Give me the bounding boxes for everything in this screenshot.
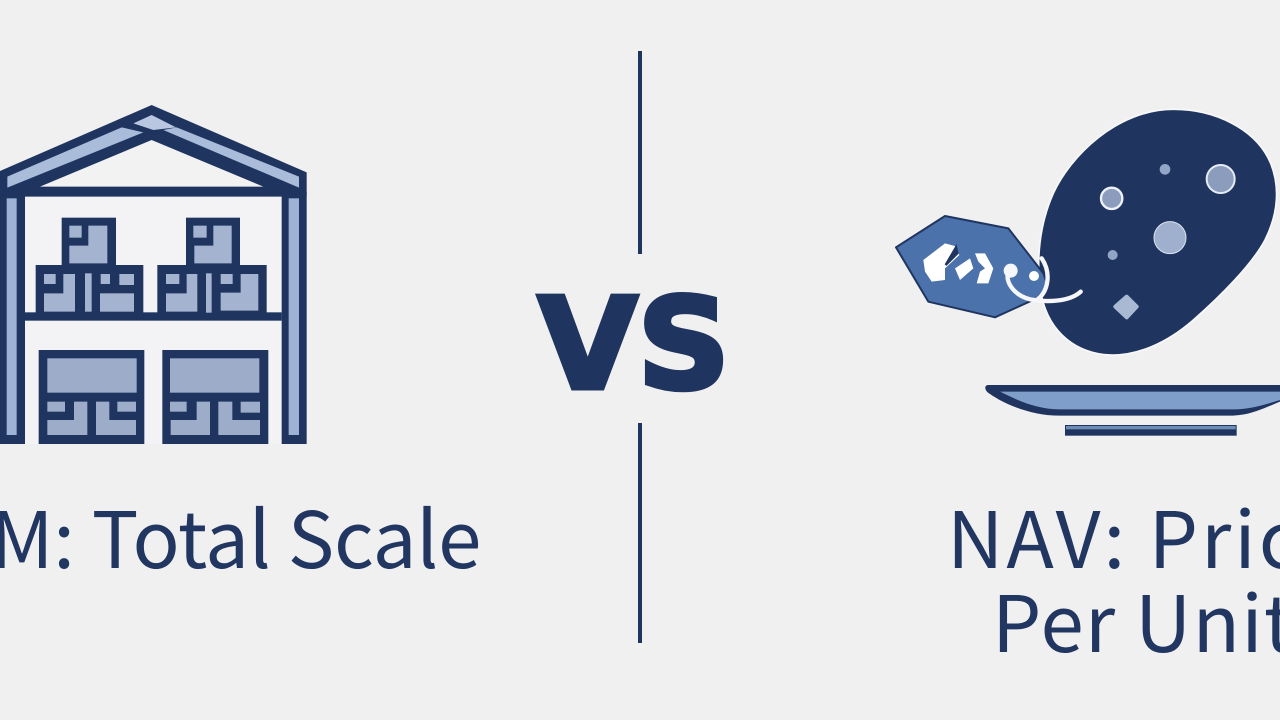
label: NAV price per unit bbox=[947, 479, 1280, 675]
icon: potato with price tag on plate bbox=[896, 109, 1280, 436]
divider: vertical line top bbox=[638, 51, 642, 254]
tag string bbox=[1008, 258, 1081, 301]
VS heading: VS bbox=[538, 271, 730, 418]
potato spots bbox=[1101, 164, 1235, 317]
lower crates bbox=[39, 350, 268, 444]
plate base bbox=[1065, 425, 1237, 436]
price tag bbox=[896, 216, 1081, 317]
tag symbols bbox=[923, 243, 993, 283]
warehouse roof bbox=[0, 105, 307, 197]
plate bbox=[985, 385, 1280, 436]
potato bbox=[1039, 109, 1277, 355]
warehouse walls bbox=[0, 192, 307, 444]
divider: vertical line bottom bbox=[638, 423, 642, 643]
icon: warehouse bbox=[0, 105, 307, 444]
upper stacked boxes bbox=[25, 218, 282, 321]
warehouse interior bbox=[25, 195, 282, 444]
